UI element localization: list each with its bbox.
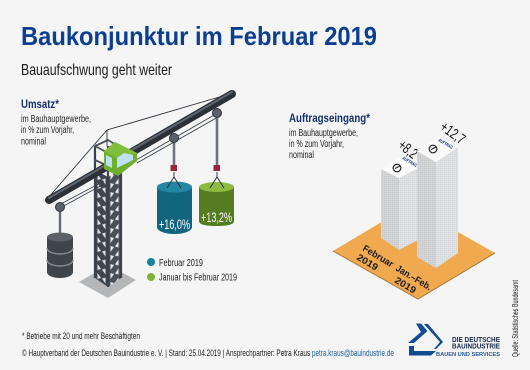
- footer credits: © Hauptverband der Deutschen Bauindustrie e. V. | Stand: 25.04.2019 | Ansprechpartner: Petra Kraus petra.kraus@bauindustrie.de: [22, 348, 394, 358]
- tower base plate: [79, 265, 136, 298]
- plate labels: 2019: [354, 252, 380, 273]
- panel: Umsatz heading and description: in % zum Vorjahr,: [21, 125, 74, 136]
- panel: Auftragseingang heading and description: Auftragseingang*: [289, 111, 370, 125]
- plate labels: 2019: [392, 275, 418, 296]
- orange base plate: [333, 205, 495, 299]
- plate labels: [354, 243, 433, 296]
- footnote: * Betriebe mit 20 und mehr Beschäftigten: [22, 331, 140, 341]
- legend: Februar 2019: [159, 258, 203, 269]
- panel: Umsatz heading and description: Umsatz*: [21, 97, 59, 111]
- paper stack bar: Februar 2019: [381, 137, 421, 250]
- support cables: [48, 93, 233, 198]
- crane tower lattice: [95, 140, 121, 287]
- paper stack bar: Januar bis Februar 2019: AUFTRAG: [438, 138, 454, 150]
- title: Baukonjunktur im Februar 2019: [21, 21, 377, 51]
- logo: Die Deutsche Bauindustrie: BAUEN UND SERVICES: [436, 352, 500, 358]
- plate labels: Jan.–Feb.: [393, 263, 433, 293]
- panel: Umsatz heading and description: [21, 97, 91, 148]
- counterweight with pulley: [47, 202, 73, 278]
- paper stack bar: Februar 2019: AUFTRAG: [402, 156, 418, 168]
- trolley rails: [59, 114, 218, 208]
- panel: Auftragseingang heading and description: [289, 111, 370, 161]
- plate labels: Februar: [360, 243, 396, 270]
- crane illustration: [47, 92, 234, 298]
- legend: [147, 258, 237, 284]
- green load: Januar bis Februar 2019: +13,2%: [201, 209, 232, 225]
- logo: Die Deutsche Bauindustrie: BAUINDUSTRIE: [452, 342, 500, 350]
- subtitle: Bauaufschwung geht weiter: [21, 62, 173, 79]
- crane cabin: [104, 142, 137, 176]
- panel: Auftragseingang heading and description: in % zum Vorjahr,: [289, 139, 344, 150]
- panel: Umsatz heading and description: nominal: [21, 136, 46, 148]
- paper stack bar: Januar bis Februar 2019: [417, 118, 468, 268]
- source note: Quelle: Statistisches Bundesamt: [511, 279, 520, 357]
- green load: Januar bis Februar 2019: [199, 108, 234, 226]
- panel: Umsatz heading and description: im Bauhauptgewerbe,: [21, 114, 91, 125]
- teal load: Februar 2019: +16,0%: [159, 216, 190, 232]
- panel: Auftragseingang heading and description: nominal: [289, 150, 314, 161]
- teal load: Februar 2019: [157, 134, 192, 234]
- crane jib: [49, 92, 232, 200]
- panel: Auftragseingang heading and description: im Bauhauptgewerbe,: [289, 128, 358, 139]
- legend: Januar bis Februar 2019: [159, 272, 237, 284]
- logo: Die Deutsche Bauindustrie: DIE DEUTSCHE: [452, 335, 500, 344]
- logo: Die Deutsche Bauindustrie: [408, 324, 500, 358]
- paper stack bar: Januar bis Februar 2019: +12,7: [437, 118, 468, 148]
- paper stack bar: Februar 2019: +8,2: [395, 137, 421, 162]
